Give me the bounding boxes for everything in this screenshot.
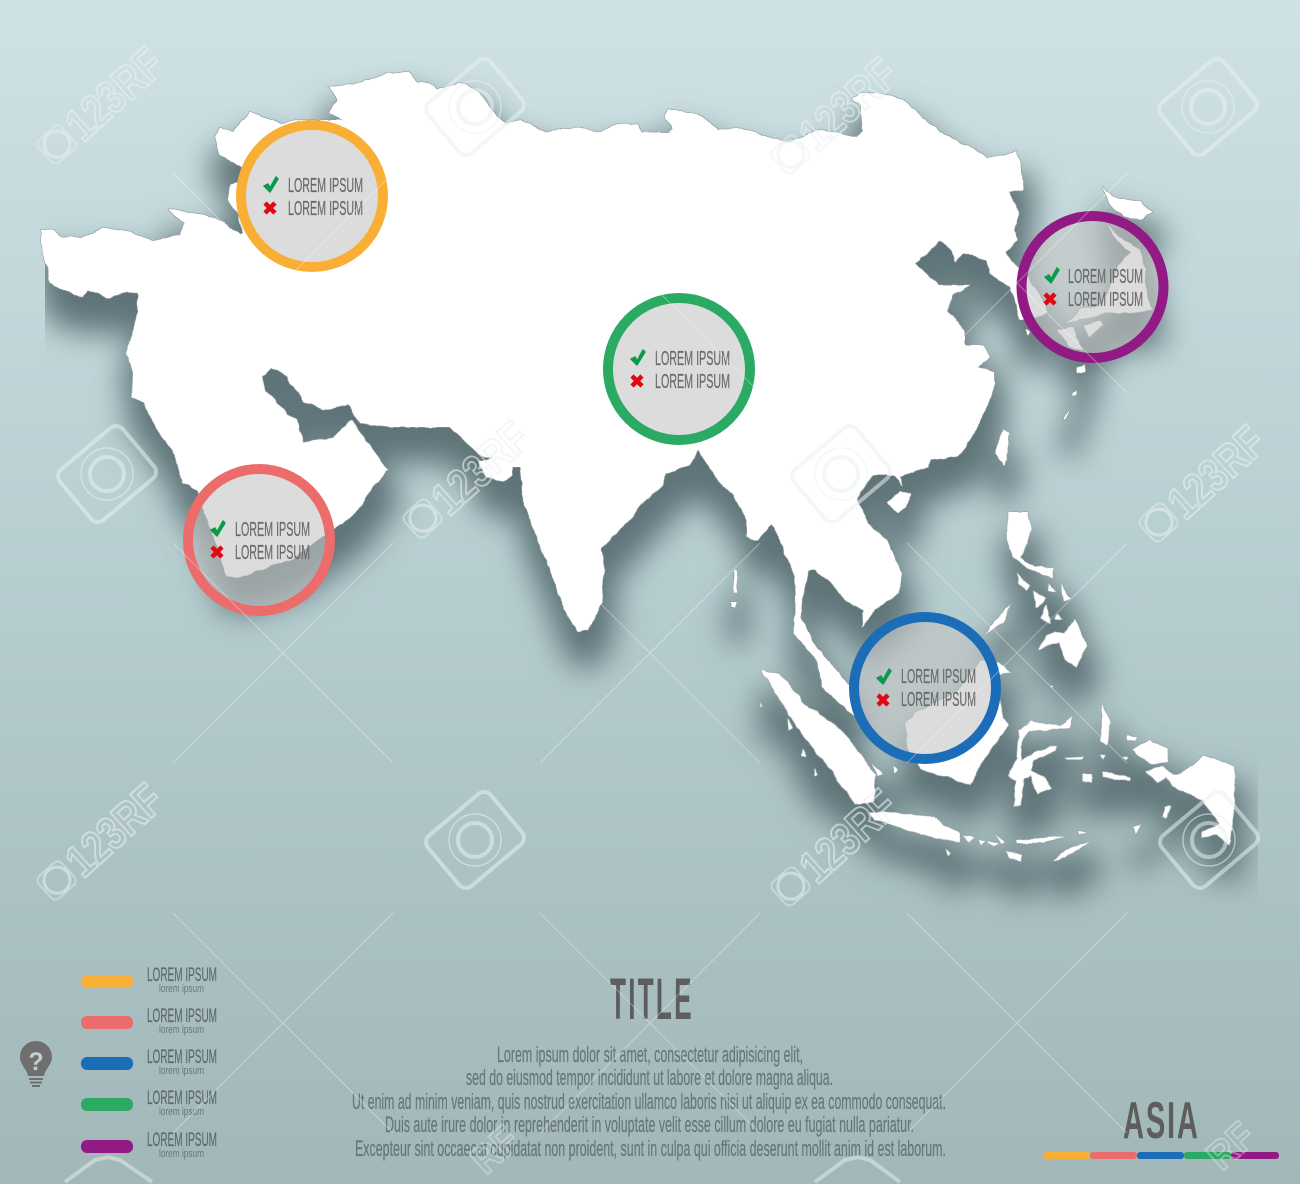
cross icon (265, 203, 275, 213)
legend label: LOREM IPSUM (147, 965, 217, 986)
check icon (877, 669, 891, 684)
marker label: LOREM IPSUM (901, 689, 976, 711)
legend label: LOREM IPSUM (147, 1130, 217, 1151)
marker label: LOREM IPSUM (235, 542, 310, 564)
marker label: LOREM IPSUM (288, 175, 363, 197)
legend sublabel: lorem ipsum (159, 1065, 204, 1077)
legend label: LOREM IPSUM (147, 1047, 217, 1068)
legend sublabel: lorem ipsum (159, 983, 204, 995)
cross icon (212, 547, 222, 557)
cross icon (878, 695, 888, 705)
marker label: LOREM IPSUM (288, 198, 363, 220)
marker label: LOREM IPSUM (655, 371, 730, 393)
Indonesia, Philippines and New Guinea islands (760, 512, 1235, 862)
watermark overlay: RF (463, 1118, 528, 1183)
region label: ASIA (1123, 1091, 1200, 1149)
title: TITLE (610, 966, 694, 1032)
marker: purple (1022, 216, 1164, 358)
legend sublabel: lorem ipsum (159, 1148, 204, 1160)
icon: question lightbulb: ? (28, 1048, 44, 1076)
marker label: LOREM IPSUM (1068, 289, 1143, 311)
Japan and Korea islands (1025, 187, 1152, 420)
legend label: LOREM IPSUM (147, 1006, 217, 1027)
legend label: LOREM IPSUM (147, 1088, 217, 1109)
legend swatch: green (81, 1098, 133, 1111)
check icon (264, 177, 278, 192)
check icon (211, 521, 225, 536)
cross icon (632, 376, 642, 386)
marker label: LOREM IPSUM (235, 519, 310, 541)
marker: blue (854, 617, 996, 759)
cross icon (1045, 294, 1055, 304)
legend swatch: purple (81, 1140, 133, 1153)
marker label: LOREM IPSUM (655, 348, 730, 370)
icon: question lightbulb (20, 1041, 52, 1086)
legend (81, 965, 217, 1160)
legend swatch: blue (81, 1057, 133, 1070)
marker: orange (241, 125, 383, 267)
marker: coral (188, 469, 330, 611)
body text: sed do eiusmod tempor incididunt ut labore et dolore magna aliqua. (466, 1065, 833, 1090)
Taiwan and Hainan (887, 429, 1010, 513)
legend swatch: coral (81, 1016, 133, 1029)
colour strip (1043, 1152, 1279, 1159)
body text: Duis aute irure dolor in reprehenderit in voluptate velit esse cillum dolore eu fugiat nulla pariatur. (385, 1112, 914, 1137)
body text (352, 1042, 946, 1161)
Andaman islands (731, 569, 738, 608)
legend sublabel: lorem ipsum (159, 1106, 204, 1118)
legend swatch: orange (81, 975, 133, 988)
map of Asia (41, 73, 1235, 862)
marker label: LOREM IPSUM (1068, 266, 1143, 288)
check icon (1045, 268, 1059, 283)
legend sublabel: lorem ipsum (159, 1024, 204, 1036)
watermark overlay: RF (1199, 1114, 1264, 1179)
marker: green (608, 298, 750, 440)
check icon (631, 350, 645, 365)
marker label: LOREM IPSUM (901, 666, 976, 688)
body text: Lorem ipsum dolor sit amet, consectetur adipisicing elit, (497, 1042, 803, 1067)
mainland Asia (41, 73, 1048, 716)
